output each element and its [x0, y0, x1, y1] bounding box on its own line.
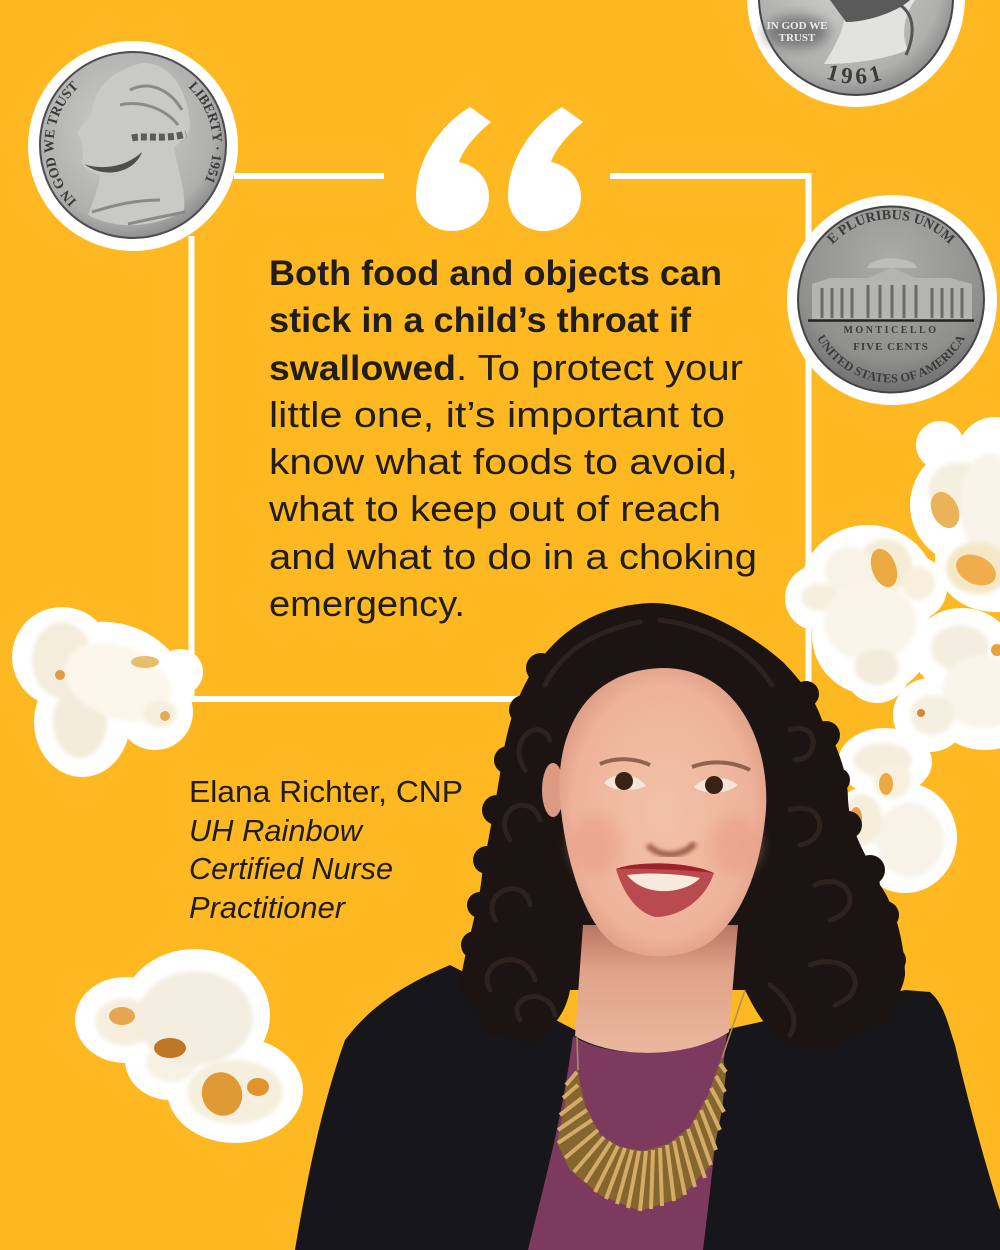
quote text: know what foods to avoid,	[269, 441, 738, 482]
icon: nickel Monticello coin: FIVE CENTS	[853, 341, 929, 353]
icon: popcorn right lower	[893, 608, 1000, 752]
icon: nickel Monticello coin	[787, 195, 997, 405]
attribution: Practitioner	[189, 890, 347, 925]
purple top	[528, 1034, 727, 1250]
ear	[542, 763, 564, 817]
icon: quarter coin: 1961	[827, 66, 882, 84]
icon: nickel portrait coin: IN GOD WE TRUST	[44, 80, 78, 207]
icon: nickel portrait coin: LIBERTY · 1951	[188, 80, 222, 182]
eyes	[604, 775, 646, 790]
portrait of Elana Richter	[295, 603, 1000, 1250]
quote text: emergency.	[269, 583, 465, 624]
attribution: Elana Richter, CNP	[189, 774, 463, 809]
face	[559, 668, 766, 956]
icon: popcorn lower right	[837, 728, 957, 893]
nose	[648, 843, 695, 855]
quote frame	[192, 176, 808, 760]
hair	[460, 603, 906, 1049]
quote text: stick in a child’s throat if	[269, 300, 691, 340]
necklace	[557, 990, 745, 1211]
quote text: . To protect your	[456, 347, 743, 388]
icon: nickel Monticello coin: MONTICELLO	[843, 325, 939, 336]
quote text: what to keep out of reach	[268, 488, 721, 529]
icon: quarter coin	[747, 0, 965, 107]
neck	[575, 925, 738, 1053]
icon: quarter coin: IN GOD WE	[767, 20, 827, 32]
quote text: Both food and objects can	[269, 253, 722, 293]
icon: nickel Monticello coin: E PLURIBUS UNUM	[826, 210, 956, 244]
attribution	[189, 774, 463, 925]
quote text: and what to do in a choking	[269, 536, 757, 577]
icon: popcorn top right	[910, 417, 1000, 612]
quote text: little one, it’s important to	[269, 394, 725, 435]
quote text: swallowed	[269, 348, 456, 388]
icon: quarter coin: TRUST	[779, 32, 816, 44]
icon: nickel portrait coin	[28, 41, 238, 251]
hair curls	[487, 620, 855, 1035]
attribution: Certified Nurse	[189, 851, 393, 886]
attribution: UH Rainbow	[189, 813, 365, 848]
blazer	[295, 965, 1000, 1250]
icon: nickel Monticello coin: UNITED STATES OF AMERICA	[818, 334, 966, 382]
eyebrows	[600, 759, 750, 770]
cheeks	[570, 815, 760, 875]
mouth	[616, 863, 714, 917]
icon: popcorn left	[12, 602, 203, 777]
icon: popcorn middle right	[785, 525, 947, 703]
icon: popcorn lower left	[75, 949, 303, 1143]
quote text	[268, 253, 757, 624]
icon: quotation marks	[416, 107, 583, 231]
